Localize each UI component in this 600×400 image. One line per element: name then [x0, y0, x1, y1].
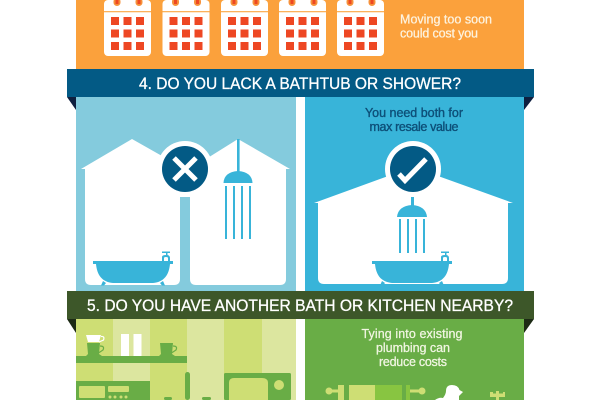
icon: radio	[76, 381, 150, 400]
icon: tap	[490, 391, 505, 400]
icon: check badge	[385, 141, 441, 197]
icon: right house with shower	[190, 139, 290, 285]
text: tying into plumbing: Tying into existing	[362, 327, 463, 341]
text: you need both: max resale value	[370, 120, 459, 134]
icon: cross badge	[157, 141, 213, 197]
panel: no bathtub or shower	[76, 97, 296, 291]
text: tying into plumbing: plumbing can	[376, 341, 450, 355]
icon: shower	[397, 197, 427, 253]
panel: moving too soon	[76, 0, 524, 69]
ribbon: question 5	[67, 291, 534, 333]
panel: both for max resale	[305, 97, 524, 291]
icon: bathtub	[372, 252, 452, 286]
panel: kitchen illustration	[76, 319, 296, 400]
icon: house with shower and bathtub	[314, 167, 513, 286]
icon: microwave	[224, 373, 291, 400]
heading: question 5: 5. DO YOU HAVE ANOTHER BATH OR KITCHEN NEARBY?	[87, 297, 513, 315]
icon: rubber duck	[435, 385, 463, 400]
ribbon: question 4	[67, 69, 534, 110]
text: tying into plumbing: reduce costs	[379, 355, 447, 369]
text: moving too soon: could cost you	[400, 26, 478, 40]
icon: left house with bathtub	[81, 139, 190, 286]
icon: faucet	[164, 372, 211, 400]
icon: bathtub	[93, 252, 173, 286]
panel: existing plumbing	[305, 319, 524, 400]
icon: shower	[224, 139, 252, 239]
text: you need both: You need both for	[365, 106, 463, 120]
icon: calendar row	[104, 0, 384, 56]
text: moving too soon: Moving too soon	[400, 12, 492, 26]
icon: shelf with cups and glasses	[76, 334, 187, 363]
heading: question 4: 4. DO YOU LACK A BATHTUB OR SHOWER?	[139, 75, 461, 93]
icon: pipes	[326, 385, 426, 400]
